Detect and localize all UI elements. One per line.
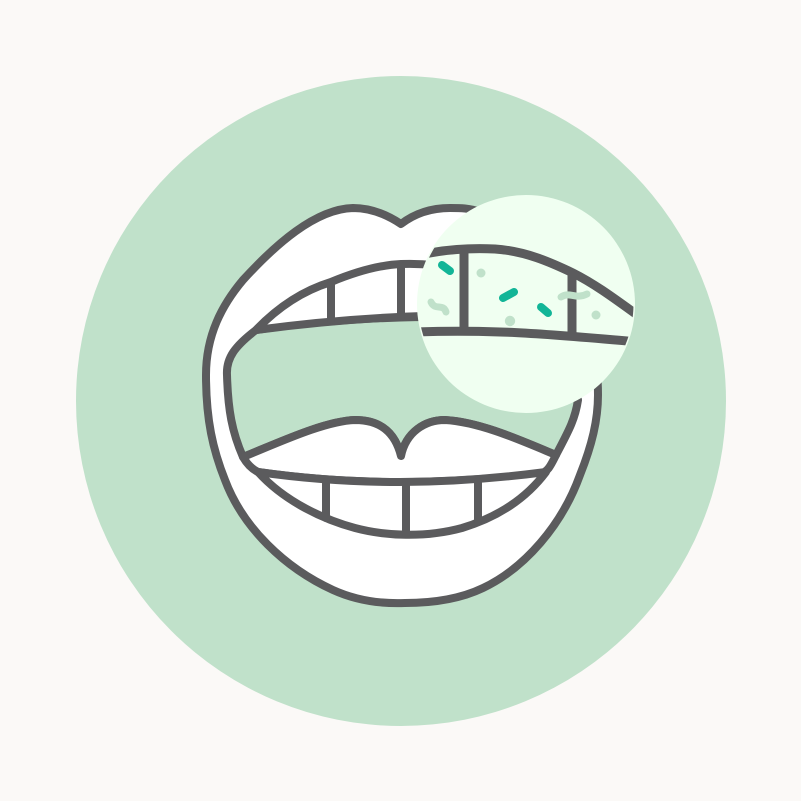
lens circle (417, 195, 635, 413)
mouth (206, 208, 598, 603)
teal bacteria (442, 265, 548, 313)
lower teeth (258, 472, 546, 535)
magnifier lens (415, 195, 640, 413)
mouth opening (227, 317, 578, 457)
magnified tooth lines (415, 249, 640, 342)
background circle (76, 76, 726, 726)
infographic: mouth with magnified tooth plaque (76, 76, 726, 726)
lower lip (243, 420, 556, 482)
lips outline (206, 208, 598, 603)
pale bacteria (431, 268, 600, 326)
upper teeth (256, 264, 480, 330)
